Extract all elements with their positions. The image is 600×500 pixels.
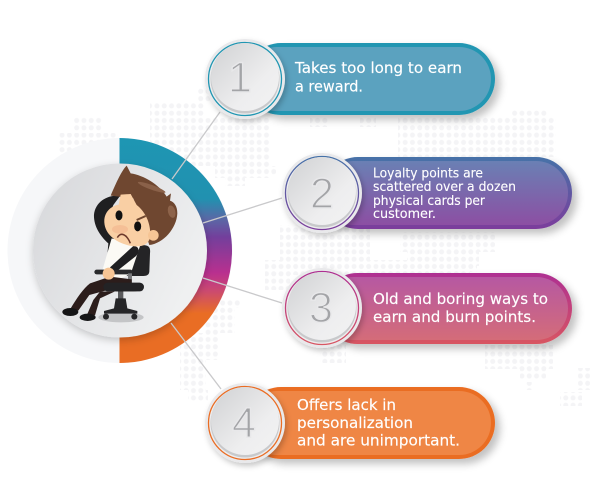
number badge 4: 4: [232, 399, 256, 447]
pill 3: old and boring: [322, 273, 572, 344]
text 1: [294, 59, 462, 96]
number badge 1: 1: [228, 54, 252, 102]
connector line 4: [171, 323, 221, 389]
text 4: Offers lack in: [297, 396, 396, 414]
text 3: [373, 290, 548, 326]
text 2: physical cards per: [373, 194, 486, 209]
panel: central disc: [33, 164, 207, 338]
number badge 3: [282, 268, 362, 348]
number badge 2: 2: [310, 170, 334, 218]
pill 2: scattered cards: [322, 157, 572, 229]
illustration: frustrated man on office chair: [62, 166, 177, 322]
background: dotted world map: [58, 87, 590, 406]
text 4: [297, 396, 460, 450]
connector line 1: [172, 112, 220, 179]
number badge 2: [282, 153, 362, 233]
number badge 3: 3: [309, 284, 333, 332]
number badge 4: [205, 383, 285, 463]
number badge 1: [205, 39, 285, 119]
text 1: a reward.: [295, 78, 363, 96]
text 2: [373, 166, 516, 222]
text 2: scattered over a dozen: [373, 180, 516, 195]
text 4: personalization: [297, 414, 413, 432]
text 2: Loyalty points are: [373, 166, 483, 182]
text 1: Takes too long to earn: [294, 59, 462, 77]
pill 1: takes too long: [245, 43, 495, 115]
text 2: customer.: [373, 207, 436, 222]
panel: left pale ring: [8, 138, 232, 363]
text 3: Old and boring ways to: [373, 290, 548, 308]
connector line 3: [203, 278, 282, 303]
text 4: and are unimportant.: [297, 432, 460, 450]
panel: gradient half ring: [120, 138, 232, 363]
text 3: earn and burn points.: [373, 308, 536, 326]
connector line 2: [203, 198, 282, 223]
pill 4: lack personalization: [245, 387, 495, 459]
